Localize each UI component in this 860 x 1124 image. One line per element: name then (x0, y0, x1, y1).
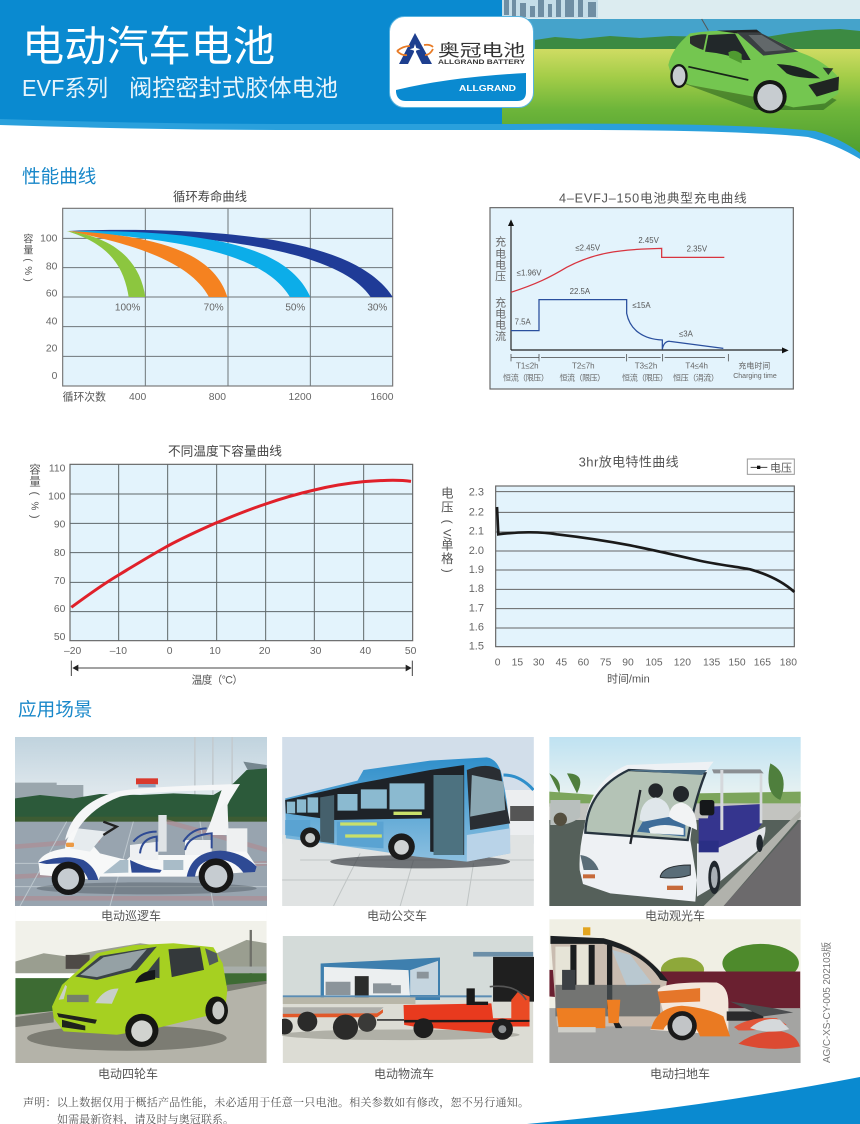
label: electric sweeper: 电动扫地车 (650, 1066, 710, 1081)
x axis labels: 10 (209, 646, 221, 657)
y axis labels: 充 (495, 235, 506, 249)
charging stage labels: 恒压（涓流） (673, 372, 719, 382)
y axis labels: 60 (54, 604, 66, 615)
y axis title: 压 (441, 500, 454, 514)
y axis title (440, 487, 454, 573)
heading: performance curves: 性能曲线 (22, 166, 96, 187)
charging stage labels: 恒流（限压） (503, 372, 549, 382)
chart title: 4–EVFJ–150电池典型充电曲线 (559, 191, 747, 206)
x axis labels (64, 646, 417, 657)
y axis labels: 20 (46, 344, 58, 355)
y axis labels: 50 (54, 632, 66, 643)
curve value labels: ≤1.96V (517, 269, 542, 278)
charging stage labels: 充电时间 (738, 361, 770, 371)
plot area (63, 208, 393, 386)
y axis labels: 2.3 (469, 487, 484, 499)
chart title: 不同温度下容量曲线 (168, 444, 282, 459)
y axis title: ( (28, 491, 40, 495)
car body (52, 943, 227, 1035)
chart: cycle life curve (22, 189, 394, 404)
y axis labels (40, 234, 58, 382)
y axis title: 量 (29, 476, 41, 489)
x axis labels: 30 (533, 657, 545, 668)
y axis labels: 90 (54, 519, 66, 530)
curve value labels: 22.5A (570, 287, 591, 296)
y axis title: 量 (23, 245, 33, 257)
subtitle: 阀控密封式胶体电池 (129, 75, 338, 101)
y axis labels: 40 (46, 316, 58, 327)
curve value labels: ≤2.45V (575, 243, 601, 252)
x axis labels: 循环次数 (63, 390, 106, 404)
y axis labels: 80 (46, 261, 58, 272)
y axis labels: 1.5 (469, 640, 484, 652)
y axis title: ) (28, 515, 40, 519)
x axis labels: 15 (512, 657, 523, 668)
x axis labels: 40 (360, 646, 371, 657)
x axis labels: 0 (167, 646, 173, 657)
logo chinese name: 奥冠电池 (438, 41, 525, 60)
label: electric four-wheeler: 电动四轮车 (98, 1066, 158, 1081)
curve value labels: 2.45V (638, 236, 660, 245)
y axis title: % (22, 266, 33, 275)
x axis title: 时间/min (607, 673, 650, 686)
curve: 100% depth of discharge (67, 231, 145, 297)
charging stage labels: T4≤4h (685, 362, 708, 371)
y axis labels: 2.2 (469, 506, 484, 518)
logo card (390, 16, 534, 108)
cart roof and pillars (65, 784, 240, 840)
x axis labels: 165 (754, 657, 771, 668)
y axis title: 单 (441, 539, 454, 553)
chart: typical charging curve (490, 191, 793, 389)
label: electric bus: 电动公交车 (367, 908, 427, 923)
logo mark (397, 33, 433, 64)
label: electric patrol car: 电动巡逻车 (101, 908, 161, 923)
y axis title: ) (440, 569, 454, 573)
y axis labels: 2.0 (469, 545, 484, 557)
disclaimer: 声明：以上数据仅用于概括产品性能，未必适用于任意一只电池。相关参数如有修改，恕不另行通知。 (23, 1094, 529, 1110)
y axis labels: 电 (495, 319, 506, 332)
y axis labels: 2.1 (469, 526, 484, 538)
label: electric sightseeing car: 电动观光车 (645, 908, 705, 923)
y axis title: 电 (441, 487, 454, 501)
y axis labels (48, 464, 66, 643)
time period dimension lines (511, 354, 728, 361)
photo: electric logistics vehicle (282, 936, 534, 1063)
x axis labels: 105 (645, 657, 663, 668)
y axis title (28, 462, 41, 519)
charging stage labels: T2≤7h (572, 362, 595, 371)
charging stage labels: T3≤2h (635, 362, 657, 371)
y axis labels: 电 (495, 308, 506, 321)
plot area (70, 464, 413, 641)
windshield (585, 770, 705, 840)
y axis labels: 压 (495, 270, 506, 283)
charging stage labels: 恒流（限压） (622, 372, 668, 382)
trailer (283, 1007, 384, 1017)
temperature range arrow (71, 661, 412, 676)
header blue background (0, 0, 503, 126)
plot area (496, 486, 794, 647)
x axis labels: 180 (780, 657, 797, 668)
bottom blue wedge (527, 1077, 860, 1124)
y axis labels: 110 (49, 464, 66, 475)
charging stage labels: T1≤2h (516, 362, 539, 371)
y axis title: 容 (23, 233, 33, 246)
y axis title: ( (22, 258, 33, 262)
cart body (38, 828, 257, 880)
x axis title: 温度（°C） (192, 673, 243, 686)
x axis labels (495, 657, 797, 668)
chart: 3hr discharge curve (440, 455, 797, 686)
axes with arrows (508, 219, 789, 353)
sweeper brushes (734, 1018, 787, 1031)
x axis labels: 90 (622, 657, 634, 668)
x axis labels (63, 390, 394, 404)
logo swoosh label: ALLGRAND (459, 84, 516, 93)
tractor (404, 1003, 530, 1033)
y axis labels: 100 (48, 491, 66, 502)
y axis labels: 80 (54, 548, 66, 559)
vehicle roof and seats (712, 769, 764, 773)
curve value labels: ≤3A (679, 330, 694, 339)
y axis labels: 70 (54, 576, 66, 587)
y axis labels: 1.8 (469, 583, 484, 595)
capacity curve (71, 480, 411, 607)
curve value labels: ≤15A (632, 301, 651, 310)
x axis labels: 1200 (289, 392, 312, 403)
curve value labels: 2.35V (687, 244, 708, 253)
y axis labels: 100 (40, 234, 58, 245)
document code: AG/C-XS-CY-005 202103版 (820, 942, 833, 1063)
x axis labels: 30 (310, 646, 322, 657)
y axis labels: 0 (52, 371, 58, 382)
y axis title: ( (440, 520, 454, 525)
y axis labels: 60 (46, 289, 58, 300)
y axis title: ) (22, 278, 33, 282)
curve labels: 50% (285, 303, 305, 314)
voltage curve (497, 507, 794, 592)
photo: electric sweeper (549, 919, 801, 1063)
legend (747, 459, 794, 475)
chart title: 循环寿命曲线 (173, 189, 247, 204)
y axis labels: 1.7 (469, 602, 484, 614)
chart: capacity at different temperatures (28, 444, 417, 686)
charging stage labels: 恒流（限压） (559, 372, 605, 382)
charging stage labels (503, 361, 777, 382)
header photo: green car on grass (502, 0, 860, 159)
label: electric logistics vehicle: 电动物流车 (374, 1066, 434, 1081)
curve labels: 70% (204, 303, 224, 314)
photo: electric patrol car (15, 737, 267, 906)
photo: electric sightseeing car (549, 737, 801, 906)
logo english name: ALLGRAND BATTERY (438, 59, 526, 66)
bus body (285, 757, 510, 862)
curve value labels (515, 236, 708, 339)
y axis labels: 1.9 (469, 564, 484, 576)
x axis labels: 1600 (371, 392, 394, 403)
subtitle (22, 75, 338, 101)
vehicle body (580, 762, 714, 902)
x axis labels: 60 (578, 657, 589, 668)
current curve (511, 300, 723, 349)
disclaimer (23, 1094, 529, 1124)
x axis labels: 75 (600, 657, 612, 668)
subtitle: EVF系列 (22, 75, 108, 101)
logo swoosh (396, 73, 526, 101)
y axis labels: 电 (495, 247, 506, 260)
curve labels (115, 303, 387, 314)
x axis labels: 800 (209, 392, 226, 403)
chart title: 3hr放电特性曲线 (579, 455, 679, 470)
photo: electric four-wheeler (15, 921, 267, 1063)
legend: 电压 (770, 462, 792, 475)
curve: 50% depth of discharge (68, 231, 310, 297)
x axis labels: 400 (129, 392, 147, 403)
sweeper body (556, 1000, 620, 1028)
curve: 70% depth of discharge (68, 231, 227, 297)
y axis title (22, 233, 33, 282)
y axis labels (495, 235, 506, 343)
heading: application scenarios: 应用场景 (18, 699, 92, 720)
photo: electric bus (282, 737, 534, 906)
curve value labels: 7.5A (515, 318, 532, 327)
voltage curve (511, 248, 724, 292)
y axis labels: 1.6 (469, 621, 484, 633)
curve labels: 100% (115, 303, 141, 314)
plot frame (490, 208, 793, 389)
x axis labels: 50 (405, 646, 417, 657)
x axis labels: 0 (495, 657, 501, 668)
x axis labels: 135 (703, 657, 721, 668)
header banner (0, 0, 860, 175)
y axis title: V/ (440, 529, 452, 541)
curve: 30% depth of discharge (68, 230, 393, 297)
x axis labels: 45 (556, 657, 567, 668)
x axis labels: –10 (110, 646, 127, 657)
y axis labels: 电 (495, 259, 506, 272)
sweeper cab (550, 937, 667, 1026)
y axis title: % (28, 502, 39, 511)
x axis labels: 20 (259, 646, 271, 657)
y axis title: 格 (441, 551, 454, 566)
y axis title: 容 (29, 462, 41, 476)
x axis labels: 150 (728, 657, 746, 668)
car (668, 19, 839, 113)
x axis labels: –20 (64, 646, 82, 657)
y axis labels (469, 487, 484, 652)
curve labels: 30% (367, 303, 387, 314)
charging stage labels: Charging time (733, 373, 777, 380)
title: 电动汽车电池 (22, 23, 275, 70)
y axis labels: 流 (495, 329, 506, 343)
x axis labels: 120 (674, 657, 691, 668)
y axis labels: 充 (495, 296, 506, 310)
header wave band (0, 119, 860, 170)
